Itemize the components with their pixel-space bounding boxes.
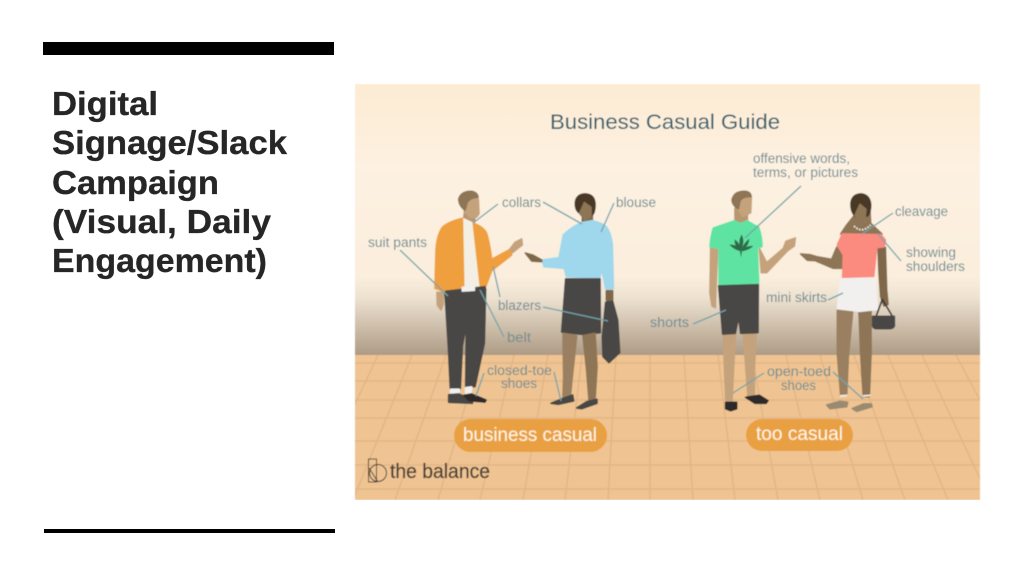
slide title: Engagement) (52, 242, 267, 279)
labels: too casual items: shoes (781, 378, 816, 393)
slide title: Signage/Slack (52, 124, 288, 161)
figure: man in orange blazer (435, 191, 522, 403)
labels: too casual items: offensive words, (753, 151, 850, 166)
labels: business casual items: blouse (616, 195, 656, 210)
labels: business casual items (368, 195, 656, 391)
callout leader lines (400, 186, 901, 401)
slide title: Campaign (52, 164, 219, 201)
labels: too casual items: shorts (650, 315, 689, 330)
labels: business casual items: closed-toe (487, 363, 552, 378)
labels: business casual items: collars (502, 195, 541, 210)
labels: too casual items: showing (906, 245, 956, 260)
labels: business casual items: suit pants (368, 235, 427, 250)
panel: business casual guide illustration (354, 84, 981, 500)
badge: too casual (746, 419, 853, 451)
top black bar (43, 42, 334, 55)
tiled floor (354, 354, 981, 500)
slide title: (Visual, Daily (52, 203, 272, 240)
slide title: Digital (52, 85, 158, 122)
badge: business casual: business casual (463, 425, 597, 446)
labels: too casual items: mini skirts (766, 290, 827, 305)
logo: the balance: the balance (390, 461, 490, 483)
labels: too casual items: shoulders (906, 259, 965, 274)
labels: business casual items: belt (507, 330, 531, 345)
figure: woman in blue blouse (525, 194, 620, 409)
slide canvas (43, 42, 981, 533)
labels: business casual items: blazers (498, 298, 541, 313)
labels: too casual items: open-toed (767, 364, 831, 379)
bottom black bar (44, 529, 335, 533)
guide heading: Business Casual Guide (550, 110, 780, 134)
slide title (52, 85, 288, 279)
figure: woman in pink top (801, 194, 894, 411)
labels: business casual items: shoes (501, 376, 537, 391)
wall background (355, 84, 980, 355)
badge: too casual: too casual (756, 424, 843, 445)
labels: too casual items: terms, or pictures (753, 165, 858, 180)
figure: man in green t-shirt (710, 191, 795, 411)
labels: too casual items (650, 151, 965, 393)
badge: business casual (454, 419, 607, 452)
icon: handbag (873, 299, 894, 329)
labels: too casual items: cleavage (895, 204, 948, 219)
icon: leaf print (729, 235, 753, 257)
